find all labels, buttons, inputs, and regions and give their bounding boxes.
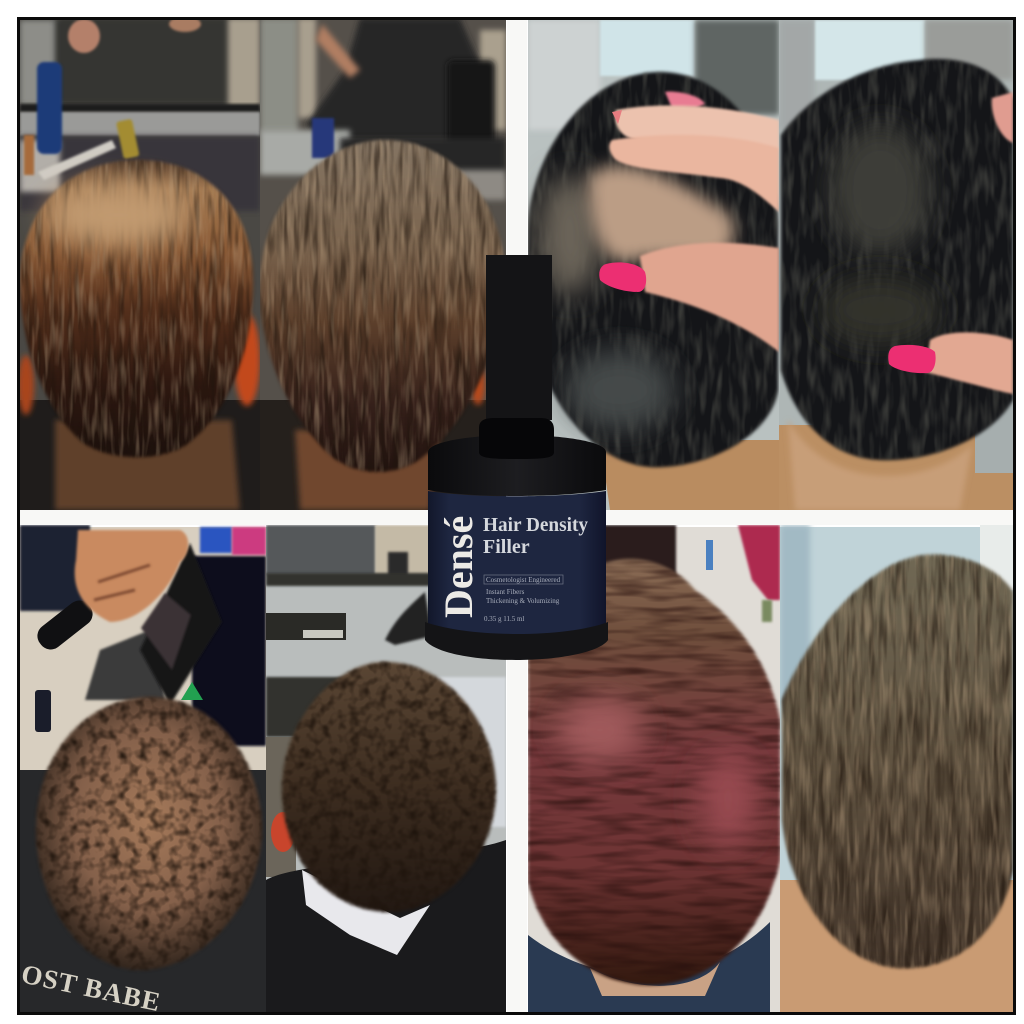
jar lid [428, 435, 606, 496]
fine print: Instant Fibers [486, 588, 525, 596]
fine print [484, 575, 563, 623]
applicator strap [486, 255, 552, 420]
shirt lettering: OST BABE [19, 959, 164, 1017]
panel: top left before photo [18, 16, 260, 510]
fine print: 0.35 g 11.5 ml [484, 615, 524, 623]
product title: Hair Density [483, 514, 588, 536]
fine print: Cosmetologist Engineered [486, 576, 561, 584]
panel: top left after photo [260, 18, 506, 510]
panel: bottom right after photo [780, 525, 1013, 1013]
brand name: Densé [436, 516, 481, 618]
applicator tab [479, 418, 554, 459]
panel: top right after photo [779, 20, 1013, 510]
panel: bottom left before photo [19, 525, 266, 1017]
icon: fingers with pink nail [888, 92, 1013, 394]
product: Densé hair density filler: Filler [483, 536, 530, 558]
product: Densé hair density filler [425, 255, 608, 660]
panel: top right before photo [528, 20, 779, 510]
icon: hand with pink nails [599, 92, 779, 352]
jar base [425, 622, 608, 660]
fine print: Thickening & Volumizing [486, 597, 560, 605]
panel: bottom left after photo [266, 525, 506, 1013]
jar body [428, 491, 606, 637]
panel: bottom right before photo [528, 525, 780, 1013]
